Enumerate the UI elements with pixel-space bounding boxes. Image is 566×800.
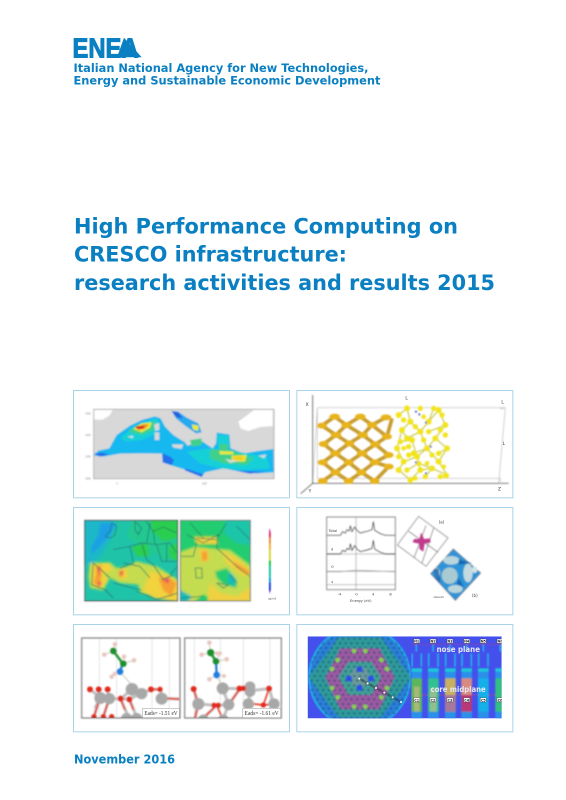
footer date: November 2016: [74, 752, 175, 766]
panel: regional climate maps: [73, 507, 289, 615]
agency name: [74, 61, 381, 87]
map axis labels: 45N: [85, 411, 91, 415]
panel: density of states chart and crystal: vGsold: [433, 595, 444, 599]
panel: density of states chart and crystal: -4: [338, 593, 342, 597]
map: Europe: [84, 520, 178, 601]
plane labels: nose plane: [437, 645, 481, 654]
axial sections: C1: [414, 698, 420, 702]
plane labels: [431, 645, 486, 694]
map axis labels: 40N: [85, 433, 91, 437]
axis labels: Y: [308, 488, 312, 494]
axial sections: N5: [481, 640, 487, 644]
left slab model: [87, 638, 179, 724]
panel: regional climate maps: ug/m3: [268, 597, 277, 601]
core cross section: [308, 636, 411, 718]
axial sections: C4: [464, 698, 470, 702]
axis labels: X: [306, 402, 309, 408]
axis labels: L: [501, 399, 504, 405]
radial traverse line: [359, 679, 401, 702]
crystal (a): [397, 516, 448, 566]
title: research activities and results 2015: [74, 271, 495, 295]
panel: Mediterranean wave map: [73, 390, 289, 498]
crystalline lattice: gold: [322, 417, 392, 481]
map axis labels: 20E: [202, 481, 207, 485]
panel: density of states chart and crystal: (a): [439, 520, 445, 525]
panel: density of states chart and crystal: 8: [389, 593, 392, 597]
borders: [92, 521, 178, 600]
agency name: Italian National Agency for New Technologies,: [74, 61, 368, 75]
axis labels: [306, 395, 506, 494]
simulation box: [313, 408, 505, 484]
title: High Performance Computing on: [74, 214, 458, 238]
map axis labels: 5: [116, 481, 118, 485]
panel: density of states chart and crystal: d: [331, 548, 333, 552]
map axis labels: [85, 411, 207, 485]
axial sections: N1: [414, 640, 420, 644]
panel: density of states chart and crystal: Energy (eV): [350, 599, 372, 603]
map axis labels: 30N: [85, 477, 91, 481]
colour scale legend: [269, 528, 271, 594]
axial sections: N6: [497, 640, 503, 644]
axial sections: C5: [481, 698, 486, 702]
panel: nuclear reactor core: [297, 624, 513, 732]
axis labels: L: [503, 441, 506, 447]
title: CRESCO infrastructure:: [74, 242, 347, 266]
islands: [127, 423, 267, 463]
panel: density of states chart and crystal: [297, 507, 513, 615]
agency name: Energy and Sustainable Economic Development: [74, 73, 381, 87]
axis labels: Z: [498, 486, 501, 492]
panel: molecule adsorption on surface: [73, 624, 289, 732]
axial sections: C2: [431, 698, 436, 702]
density of states chart: [327, 517, 395, 590]
title: [74, 214, 495, 295]
panel: density of states chart and crystal: 0: [355, 593, 358, 597]
axis labels: L: [405, 395, 408, 401]
amorphous cluster: yellow: [397, 408, 447, 480]
node markers: [414, 639, 503, 702]
panel: density of states chart and crystal: s: [331, 580, 333, 584]
panel: density of states chart and crystal: (b): [472, 593, 478, 598]
axial sections: N3: [447, 640, 453, 644]
ENEA logo: ENEA: [72, 32, 138, 63]
panel: density of states chart and crystal: p: [331, 565, 334, 569]
left energy label: Eads= -1.51 eV: [144, 711, 178, 717]
map: Italy: [180, 520, 250, 601]
left energy label: [143, 708, 179, 718]
axial sections: C3: [448, 698, 453, 702]
map axis labels: 35N: [85, 455, 91, 459]
right energy label: Eads= -1.61 eV: [245, 711, 279, 717]
panel: density of states chart and crystal: 4: [372, 593, 375, 597]
map land background: [94, 409, 274, 479]
right energy label: [243, 708, 281, 718]
right slab model: [191, 638, 280, 724]
axial sections: C6: [498, 698, 503, 702]
axial sections: N2: [430, 640, 436, 644]
axial sections: N4: [464, 640, 470, 644]
sea colours: [94, 416, 274, 477]
panel: density of states chart and crystal: Total: [328, 529, 337, 533]
crystal (b): [431, 549, 481, 600]
axial sections: [411, 636, 503, 718]
plane labels: core midplane: [431, 685, 486, 694]
panel: atomistic nanostructure model: [297, 390, 513, 498]
